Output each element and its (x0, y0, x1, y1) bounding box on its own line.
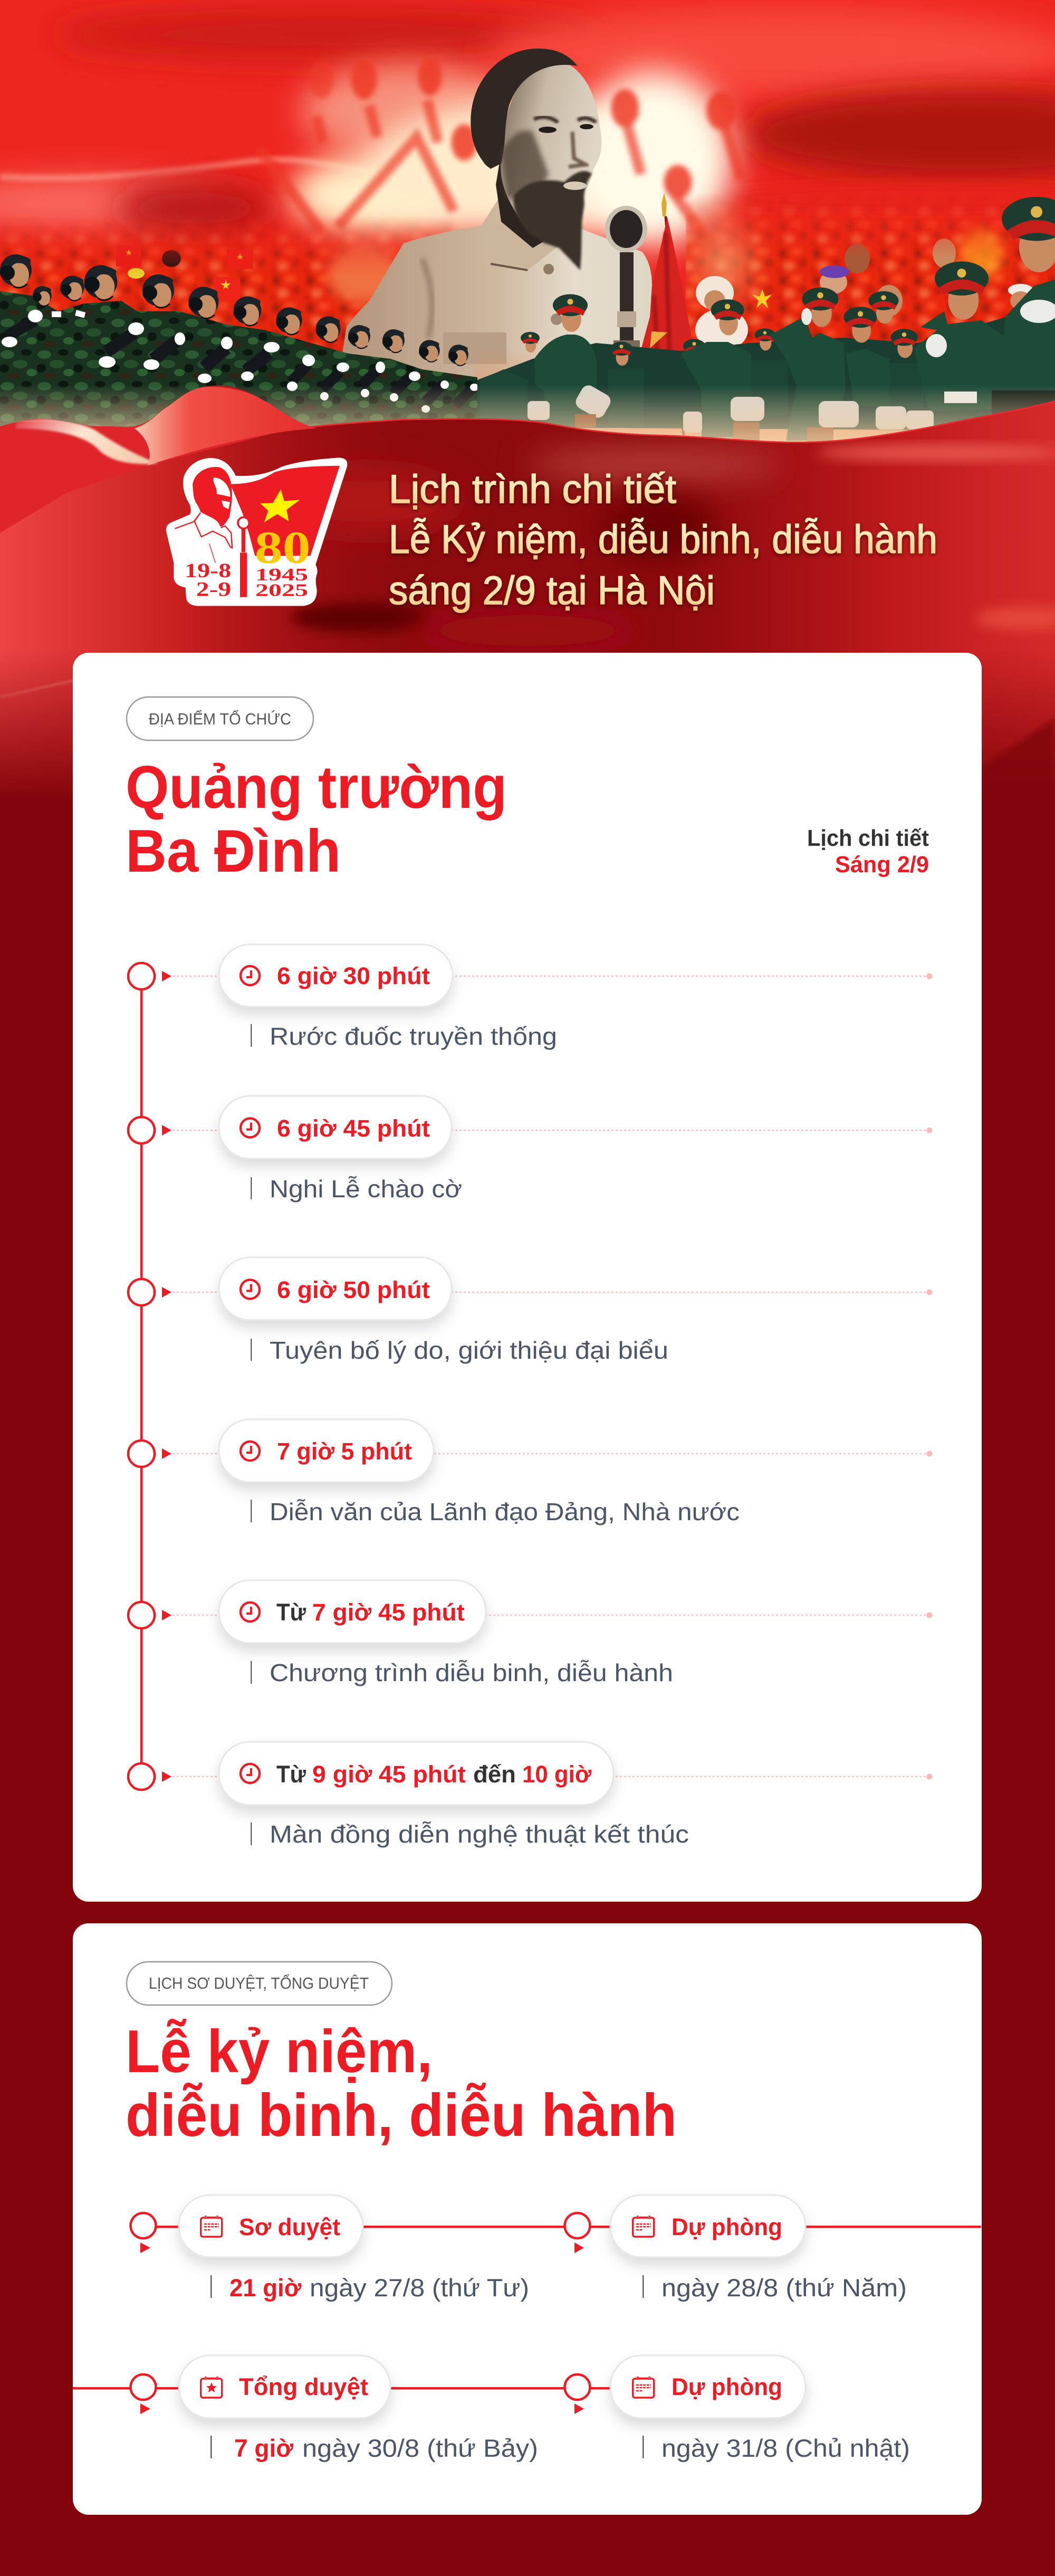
marching soldiers in camouflage (0, 254, 478, 443)
main title: Lễ Kỷ niệm, diễu binh, diễu hành (389, 517, 937, 562)
connector line, first row (143, 2226, 981, 2228)
timeline row: 6 giờ 45 phút: 6 giờ 45 phút (277, 1115, 430, 1142)
year 1945: 1945 (255, 565, 308, 585)
rehearsal item: Dự phòng 31/8 (564, 2355, 910, 2462)
main title: Lịch trình chi tiết (389, 467, 676, 512)
date 19-8: 19-8 (185, 559, 231, 582)
schedule caption: Sáng 2/9 (835, 852, 929, 877)
timeline row: 6 giờ 30 phút: 6 giờ 30 phút (277, 962, 430, 989)
soft fade at the foot of the collage (0, 385, 1055, 443)
crowd with flags, right (686, 195, 1055, 345)
year 2025: 2025 (255, 580, 308, 600)
date 2-9: 2-9 (196, 577, 231, 600)
timeline row: Từ 9 giờ 45 phút đến 10 giờ (128, 1742, 933, 1848)
rehearsal item: Tổng duyệt: Tổng duyệt (239, 2373, 368, 2400)
card background (73, 1923, 982, 2515)
timeline row: 6 giờ 50 phút: 6 giờ 50 phút (277, 1276, 430, 1303)
rehearsal item: Dự phòng 28/8 (564, 2195, 907, 2302)
portrait of President Ho Chi Minh (338, 49, 652, 385)
rehearsal item: Dự phòng 28/8: ngày 28/8 (thứ Năm) (661, 2274, 907, 2302)
timeline row: 6 giờ 50 phút (128, 1257, 933, 1364)
bright edge of the wave (310, 400, 1055, 442)
timeline row: Từ 7 giờ 45 phút: 7 giờ 45 phút (312, 1599, 465, 1626)
timeline row: Từ 9 giờ 45 phút đến 10 giờ: đến (473, 1761, 516, 1788)
rehearsal item: Dự phòng 31/8: ngày 31/8 (Chủ nhật) (661, 2434, 910, 2462)
venue heading (126, 754, 507, 885)
panel: rehearsal schedule (73, 1923, 982, 2515)
rehearsal item: Sơ duyệt: ngày 27/8 (thứ Tư) (310, 2274, 529, 2302)
honor guard officers on horseback (477, 197, 1055, 443)
rehearsal item: Tổng duyệt: ngày 30/8 (thứ Bảy) (302, 2434, 538, 2462)
timeline row: 6 giờ 45 phút: Nghi Lễ chào cờ (270, 1175, 462, 1203)
timeline spine (140, 976, 142, 1777)
microphone (238, 517, 249, 597)
timeline row: 6 giờ 45 phút (128, 1096, 933, 1203)
timeline row: 6 giờ 30 phút: Rước đuốc truyền thống (270, 1023, 557, 1050)
portrait silhouette (175, 467, 252, 563)
timeline row: 7 giờ 5 phút (128, 1419, 933, 1525)
venue tag (127, 697, 313, 740)
rehearsal tag: LỊCH SƠ DUYỆT, TỔNG DUYỆT (149, 1973, 369, 1992)
venue heading: Ba Đình (126, 818, 341, 885)
rehearsal item: Dự phòng 28/8: Dự phòng (672, 2214, 782, 2240)
rehearsal item: Sơ duyệt: 21 giờ (229, 2274, 302, 2302)
schedule caption: Lịch chi tiết (807, 825, 929, 851)
timeline row: Từ 7 giờ 45 phút (128, 1580, 933, 1686)
raised fists in the glow (258, 58, 741, 248)
timeline row: 6 giờ 30 phút (128, 944, 933, 1050)
number 80: 80 (255, 522, 311, 573)
rehearsal item: Tổng duyệt: 7 giờ (234, 2434, 294, 2462)
rehearsal item: Sơ duyệt (131, 2195, 529, 2302)
rehearsal item: Sơ duyệt: Sơ duyệt (239, 2214, 340, 2240)
timeline row: Từ 9 giờ 45 phút đến 10 giờ: 10 giờ (522, 1761, 591, 1788)
rehearsal item: Dự phòng 31/8: Dự phòng (672, 2373, 782, 2400)
upper left fold of the ribbon (0, 422, 316, 533)
hero photo collage (0, 0, 1055, 443)
light folds on silk (0, 385, 1055, 789)
panel: venue and detailed schedule (73, 653, 982, 1902)
fade to solid dark red (0, 649, 1055, 802)
yellow star (260, 489, 300, 522)
timeline row: Từ 9 giờ 45 phút đến 10 giờ: Màn đồng diễn nghệ thuật kết thúc (270, 1820, 689, 1848)
bright crest of the ribbon (135, 387, 316, 465)
microphone (605, 206, 647, 372)
rehearsal heading (126, 2018, 677, 2149)
connector line, second row (73, 2387, 611, 2389)
card background (73, 653, 982, 1902)
timeline row: Từ 7 giờ 45 phút: Từ (276, 1599, 306, 1626)
red flag on a pole (634, 193, 692, 435)
white sticker outline (166, 457, 347, 606)
red sky background (0, 0, 1055, 443)
venue heading: Quảng trường (126, 754, 507, 821)
schedule caption (807, 825, 929, 877)
timeline row: 6 giờ 50 phút: Tuyên bố lý do, giới thiệu đại biểu (270, 1337, 668, 1364)
rehearsal heading: Lễ kỷ niệm, (126, 2018, 433, 2085)
timeline row: Từ 9 giờ 45 phút đến 10 giờ: Từ (276, 1761, 306, 1788)
timeline row: 7 giờ 5 phút: 7 giờ 5 phút (277, 1438, 412, 1465)
timeline row: Từ 9 giờ 45 phút đến 10 giờ: 9 giờ 45 phút (312, 1761, 466, 1788)
rehearsal item: Tổng duyệt (131, 2355, 538, 2462)
venue tag: ĐỊA ĐIỂM TỔ CHỨC (149, 709, 291, 728)
creamy highlight on the fold (16, 419, 158, 464)
rehearsal tag (127, 1962, 392, 2005)
silk ribbon band (0, 385, 1055, 790)
crowd with flags, left (0, 218, 456, 352)
timeline row: Từ 7 giờ 45 phút: Chương trình diễu binh, diễu hành (270, 1659, 673, 1686)
main title: sáng 2/9 tại Hà Nội (389, 568, 715, 613)
anniversary logo (166, 457, 347, 606)
peach fade behind officers (475, 348, 981, 443)
rehearsal heading: diễu binh, diễu hành (126, 2082, 677, 2149)
timeline row: 7 giờ 5 phút: Diễn văn của Lãnh đạo Đảng, Nhà nước (270, 1498, 740, 1525)
white glow behind the portrait (290, 63, 733, 245)
main title (389, 467, 937, 613)
red flag (231, 466, 340, 556)
